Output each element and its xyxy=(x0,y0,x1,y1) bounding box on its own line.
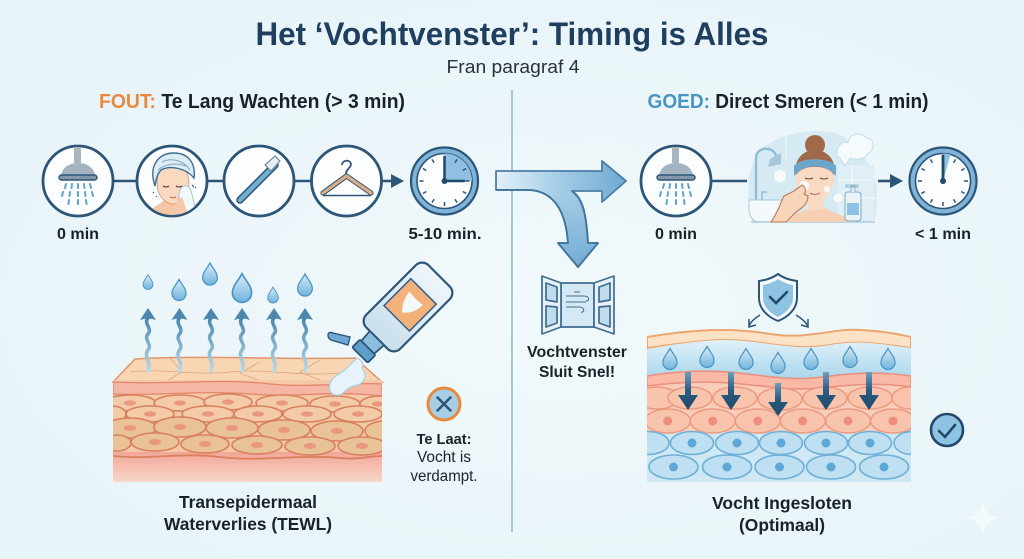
icon: check mark xyxy=(931,414,963,446)
subtitle: Fran paragraf 4 xyxy=(446,57,580,77)
icon: shower right xyxy=(641,146,711,216)
icon: open window xyxy=(542,276,614,334)
icon: shield with arrows xyxy=(749,274,808,327)
label: vocht ingesloten: (Optimaal) xyxy=(739,515,825,535)
evaporating drops xyxy=(143,263,312,303)
label: TEWL: Transepidermaal xyxy=(179,492,317,512)
label: vocht ingesloten xyxy=(712,493,852,535)
big split arrow xyxy=(496,161,626,267)
timeline connectors left xyxy=(113,174,404,188)
text: te laat: Vocht is xyxy=(417,449,471,466)
heading: fout: FOUT: Te Lang Wachten (> 3 min) xyxy=(99,90,405,113)
label: vochtvenster sluit snel: Sluit Snel! xyxy=(539,364,615,381)
icon: face with towel xyxy=(137,146,207,216)
icon: clock right xyxy=(910,148,976,214)
text: te laat xyxy=(410,431,478,485)
label: TEWL: Waterverlies (TEWL) xyxy=(164,514,332,534)
text: te laat: verdampt. xyxy=(410,468,478,485)
label: vocht ingesloten: Vocht Ingesloten xyxy=(712,493,852,513)
text: te laat: Te Laat: xyxy=(416,431,472,448)
icon: shower left xyxy=(43,146,113,216)
label: 0 min right: 0 min xyxy=(655,226,697,243)
label: less than 1 min: < 1 min xyxy=(915,226,971,243)
icon: clock left xyxy=(411,148,478,214)
icon: cream bottle xyxy=(328,259,456,395)
label: 5-10 min: 5-10 min. xyxy=(408,226,482,243)
skin block right xyxy=(647,328,911,482)
icon: x mark xyxy=(428,388,460,420)
heading: goed: GOED: Direct Smeren (< 1 min) xyxy=(648,90,928,113)
icon: toothbrush xyxy=(224,146,294,216)
label: TEWL xyxy=(164,492,332,534)
evaporation wavy arrows xyxy=(140,308,313,371)
illustration: applying cream in bathroom xyxy=(748,131,877,222)
skin block left xyxy=(111,356,384,482)
label: vochtvenster sluit snel xyxy=(527,344,627,381)
icon: hanger xyxy=(312,146,382,216)
downward moisture arrows xyxy=(678,372,879,416)
divider line xyxy=(511,90,513,532)
label: 0 min left: 0 min xyxy=(57,226,99,243)
timeline connectors right xyxy=(712,174,903,188)
title: Het ‘Vochtvenster’: Timing is Alles xyxy=(256,16,768,52)
label: vochtvenster sluit snel: Vochtvenster xyxy=(527,344,627,361)
sparkle watermark xyxy=(966,501,1000,535)
